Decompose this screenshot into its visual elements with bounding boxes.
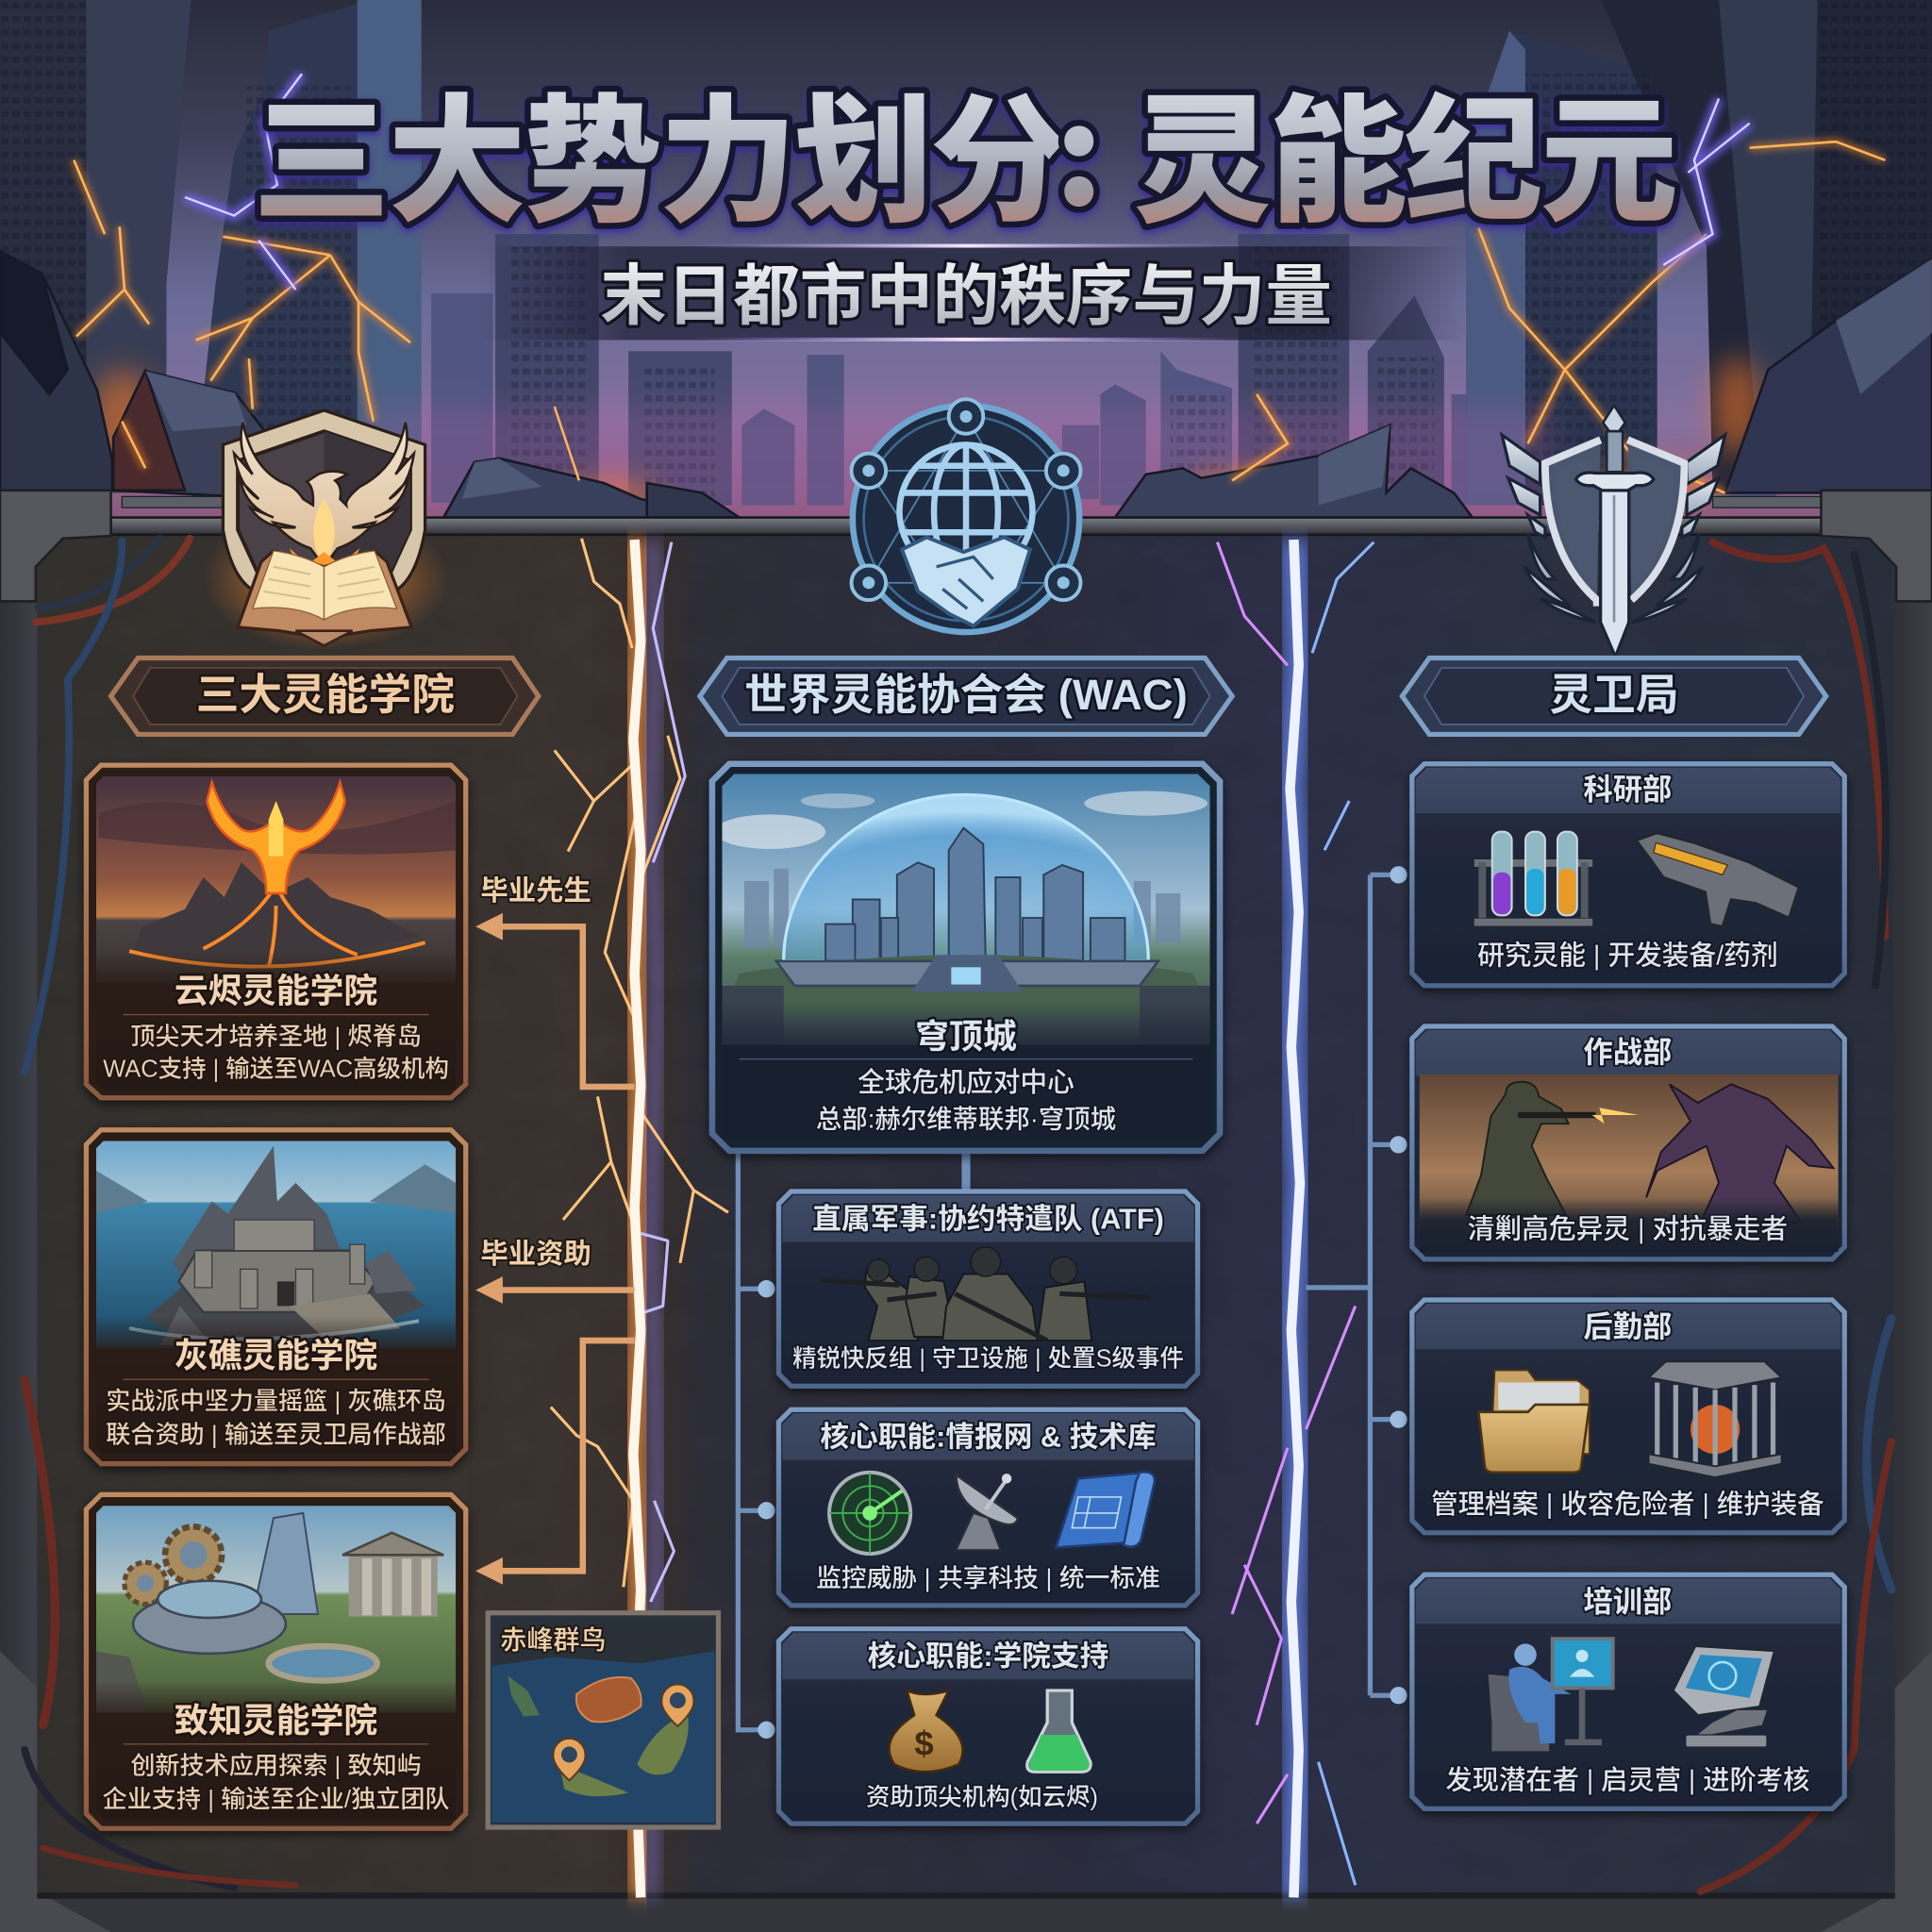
icon: soldier squad	[821, 1247, 1150, 1341]
card: logistics department: 后勤部	[1583, 1310, 1672, 1343]
card: Zhizhi academy	[86, 1494, 466, 1828]
icon: map pin upper	[661, 1684, 693, 1726]
lightning divider left	[551, 539, 728, 1897]
card: Yunjin academy	[86, 765, 466, 1098]
icon: money bag: $	[914, 1724, 934, 1763]
card: logistics department: 管理档案 | 收容危险者 | 维护装备	[1431, 1490, 1824, 1520]
card: combat department: 作战部	[1583, 1036, 1672, 1069]
icon: person at terminal	[1487, 1639, 1613, 1752]
card: Dome City headquarters	[712, 764, 1220, 1151]
arrow label: graduate teachers: 毕业先生	[480, 875, 591, 907]
lava cracks	[74, 142, 1885, 492]
icon: test tubes	[1474, 832, 1593, 926]
illustration: island fortress	[96, 1141, 457, 1348]
card: Dome City headquarters: 穹顶城	[915, 1017, 1017, 1056]
background: ruined city scene	[0, 0, 1932, 519]
card: Huizhe academy: 联合资助 | 输送至灵卫局作战部	[106, 1420, 446, 1448]
card: Zhizhi academy: 致知灵能学院	[175, 1701, 377, 1740]
icon: blueprint scroll	[1056, 1472, 1155, 1547]
title: 灵能纪元	[1134, 50, 1675, 250]
emblem: phoenix and book shield	[202, 410, 448, 651]
phoenix	[234, 423, 414, 567]
card: research department: 科研部	[1583, 774, 1672, 807]
card: combat department	[1412, 1026, 1844, 1259]
icon: money bag	[889, 1690, 963, 1772]
icon: satellite dish	[957, 1474, 1018, 1550]
icon: map pin lower	[553, 1739, 585, 1780]
banner: WAC heading: 世界灵能协合会 (WAC)	[744, 671, 1188, 719]
card: combat department: 清剿高危异灵 | 对抗暴走者	[1468, 1215, 1788, 1245]
card: Yunjin academy: WAC支持 | 输送至WAC高级机构	[103, 1057, 449, 1083]
near towers right	[1466, 31, 1657, 506]
card: research department	[1412, 764, 1844, 986]
illustration: soldier fighting monster	[1420, 1074, 1839, 1255]
illustration: volcano and phoenix	[96, 776, 457, 983]
card: Yunjin academy: 顶尖天才培养圣地 | 烬脊岛	[130, 1022, 422, 1050]
card: academy support: 核心职能:学院支持	[868, 1640, 1108, 1673]
banner: WAC heading	[700, 658, 1232, 734]
banner: bureau heading: 灵卫局	[1549, 671, 1679, 719]
card: intel and tech: 监控威胁 | 共享科技 | 统一标准	[816, 1564, 1160, 1592]
lava glow	[89, 358, 1762, 519]
rocks	[0, 251, 1932, 518]
card: ATF military	[778, 1191, 1198, 1386]
card: ATF military: 直属军事:协约特遣队 (ATF)	[812, 1202, 1164, 1235]
card: Dome City headquarters: 总部:赫尔维蒂联邦·穹顶城	[816, 1104, 1116, 1133]
illustration: domed city	[722, 774, 1209, 1045]
lightning divider right	[1217, 540, 1374, 1897]
card: ATF military: 精锐快反组 | 守卫设施 | 处置S级事件	[792, 1346, 1184, 1373]
lightning around title	[185, 74, 1750, 290]
connectors: bureau tree	[1306, 866, 1407, 1704]
subtitle band: 末日都市中的秩序与力量	[600, 258, 1332, 333]
book	[238, 551, 411, 639]
arrow: WAC to Zhizhi	[475, 1341, 635, 1585]
banner: academies heading	[111, 658, 539, 734]
distant skyline	[431, 234, 1776, 511]
icon: file folder	[1478, 1370, 1590, 1473]
card: Zhizhi academy: 企业支持 | 输送至企业/独立团队	[103, 1785, 450, 1813]
card: Zhizhi academy: 创新技术应用探索 | 致知屿	[130, 1752, 422, 1780]
banner: academies heading: 三大灵能学院	[196, 671, 455, 719]
icon: energy rifle	[1637, 833, 1799, 926]
cables	[25, 539, 1891, 1891]
icon: radar	[829, 1473, 910, 1554]
emblem: globe and handshake	[852, 399, 1080, 632]
near towers left	[0, 0, 191, 492]
card: academy support: 资助顶尖机构(如云烬)	[866, 1785, 1098, 1811]
subtitle band	[480, 244, 1466, 341]
card: training department: 培训部	[1583, 1585, 1672, 1618]
card: academy support	[778, 1629, 1198, 1824]
arrow label: graduate funding: 毕业资助	[480, 1239, 591, 1270]
map: Chifeng archipelago: 赤峰群鸟	[500, 1625, 607, 1655]
icon: green flask	[1027, 1690, 1091, 1772]
title: :	[1055, 45, 1103, 245]
card: Dome City headquarters: 全球危机应对中心	[858, 1068, 1074, 1098]
emblem: sword shield with wings	[1502, 406, 1725, 657]
icon: containment cage	[1649, 1361, 1782, 1477]
card: Huizhe academy: 灰礁灵能学院	[175, 1336, 377, 1374]
card: intel and tech: 核心职能:情报网 & 技术库	[820, 1420, 1157, 1453]
card: intel and tech	[778, 1409, 1198, 1606]
icon: scanner kiosk	[1674, 1646, 1774, 1747]
arrow: WAC to Yunjin	[475, 913, 635, 1087]
map: Chifeng archipelago	[488, 1613, 718, 1827]
metal frame and main panel	[0, 491, 1932, 1932]
arrow: WAC to Huizhe	[475, 1276, 635, 1304]
card: Huizhe academy	[86, 1130, 466, 1464]
banner: bureau heading	[1402, 658, 1826, 734]
illustration: campus with gears and temple	[96, 1506, 457, 1713]
haze near the horizon	[370, 407, 1553, 518]
card: Huizhe academy: 实战派中坚力量摇篮 | 灰礁环岛	[106, 1387, 446, 1415]
card: Yunjin academy: 云烬灵能学院	[175, 972, 377, 1010]
card: research department: 研究灵能 | 开发装备/药剂	[1477, 941, 1778, 972]
card: logistics department	[1412, 1300, 1844, 1533]
connectors: WAC tree	[738, 1151, 966, 1739]
title: 三大势力划分	[253, 50, 1066, 250]
title	[253, 45, 1675, 250]
card: training department	[1412, 1574, 1844, 1808]
card: training department: 发现潜在者 | 启灵营 | 进阶考核	[1445, 1765, 1809, 1795]
